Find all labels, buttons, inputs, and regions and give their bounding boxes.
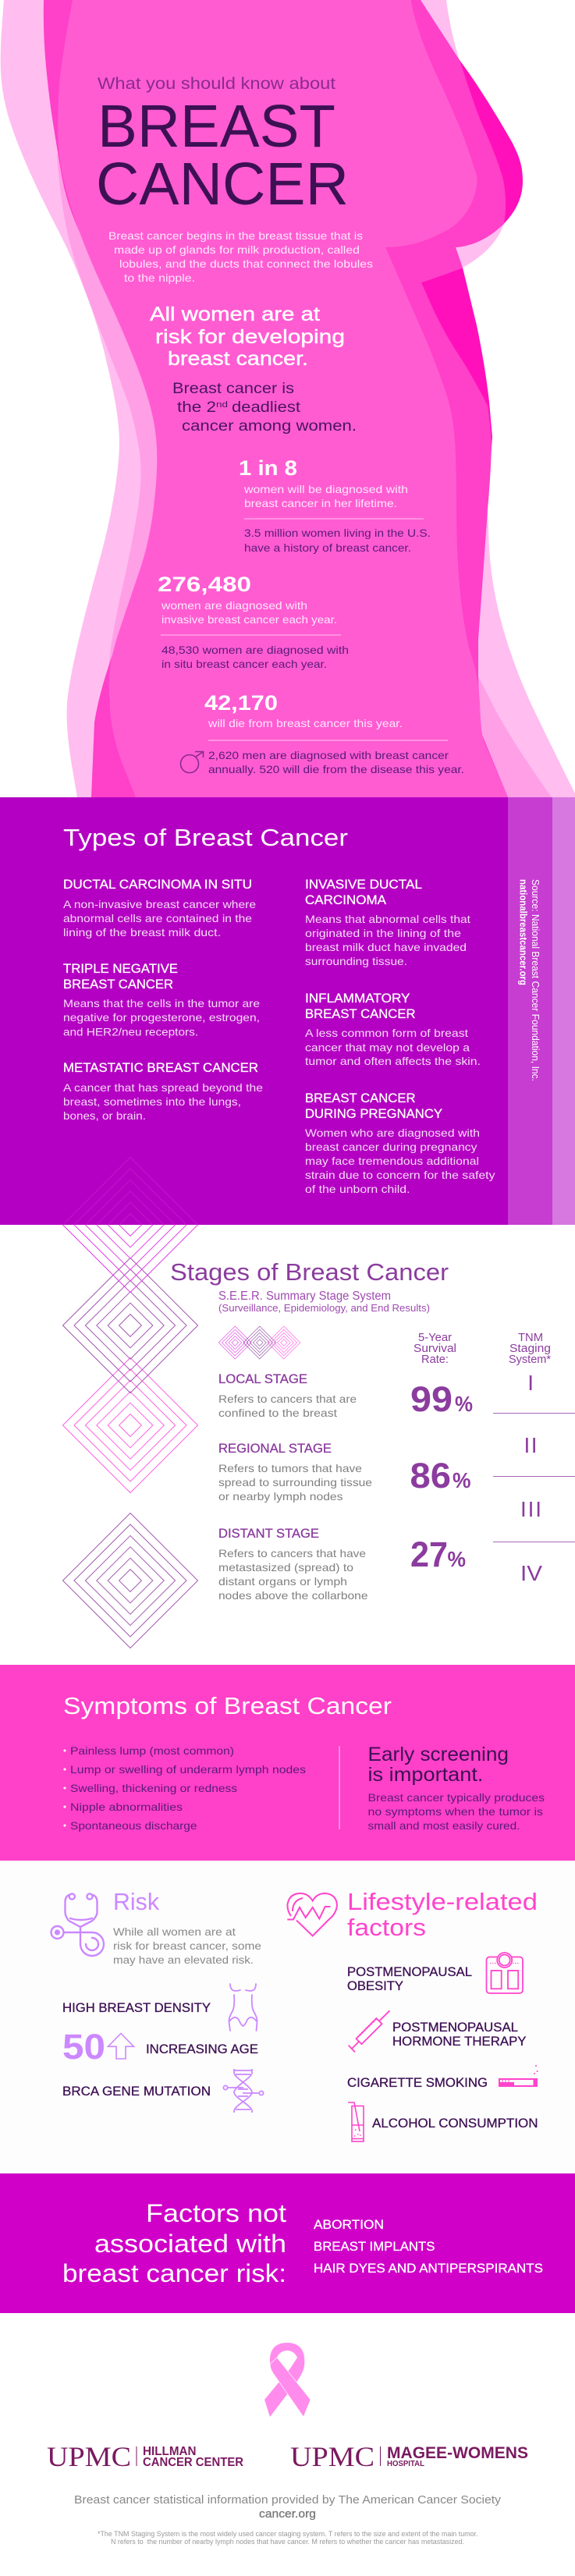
heading: risk: Risk xyxy=(113,1888,159,1915)
panel: symptoms of breast cancer xyxy=(0,1665,575,1861)
type: during pregnancy: strain due to concern for the safety xyxy=(305,1169,495,1181)
footnote: *The TNM Staging System is the most widely used cancer staging system. T refers to the size and extent of the main tumor. xyxy=(98,2530,477,2538)
type: inflammatory: tumor and often affects the skin. xyxy=(305,1055,481,1067)
logo: UPMC Magee-Womens Hospital: UPMC xyxy=(290,2441,374,2472)
lifestyle factor: obesity xyxy=(347,1965,472,1993)
callout: all women at risk: breast cancer. xyxy=(168,348,308,370)
type: invasive ductal carcinoma: INVASIVE DUCTAL xyxy=(305,878,422,892)
text block: introduction: made up of glands for milk production, called xyxy=(114,243,360,256)
footnote: N refers to the number of nearby lymph nodes that have cancer. M refers to whether the cancer has metastasized. xyxy=(111,2538,464,2546)
text block: risk: While all women are at xyxy=(113,1925,236,1938)
callout: all women at risk: All women are at xyxy=(150,303,320,325)
survival rates: % xyxy=(448,1547,466,1571)
type: triple negative: TRIPLE NEGATIVE xyxy=(63,962,178,976)
type: during pregnancy: breast cancer during pregnancy xyxy=(305,1141,477,1153)
icon: syringe xyxy=(349,2010,390,2052)
risk factor: increasing age: 50 xyxy=(62,2027,105,2067)
type: ductal carcinoma in situ xyxy=(63,878,256,939)
statistic: 1 in 8 xyxy=(239,456,431,554)
statistic: 1 in 8: breast cancer in her lifetime. xyxy=(244,497,397,509)
type: metastatic: breast, sometimes into the lungs, xyxy=(63,1095,241,1108)
type: during pregnancy: DURING PREGNANCY xyxy=(305,1107,442,1121)
type: ductal carcinoma in situ: abnormal cells are contained in the xyxy=(63,912,252,924)
TNM numerals: II xyxy=(524,1433,537,1457)
statistic: 42,170: will die from breast cancer this year. xyxy=(208,717,403,729)
text block: risk: may have an elevated risk. xyxy=(113,1953,254,1966)
subtitle: SEER xyxy=(218,1290,430,1314)
type: during pregnancy: Women who are diagnosed with xyxy=(305,1127,480,1139)
footnote xyxy=(98,2530,477,2546)
survival rates: % xyxy=(453,1468,471,1492)
text block: introduction xyxy=(108,229,373,284)
heading: types: Types of Breast Cancer xyxy=(63,824,348,851)
type: during pregnancy xyxy=(305,1091,495,1195)
risk factor: increasing age xyxy=(62,2027,258,2067)
callout: early screening: small and most easily cured. xyxy=(368,1819,520,1832)
list: non-risk factors: ABORTION xyxy=(314,2218,384,2232)
heading: lifestyle-related factors xyxy=(347,1888,538,1941)
symptom list: Swelling, thickening or redness xyxy=(70,1782,237,1794)
credit line xyxy=(74,2493,502,2521)
heading: stages: Stages of Breast Cancer xyxy=(170,1258,449,1286)
title xyxy=(96,75,349,218)
stage: local xyxy=(218,1372,357,1419)
panel: stages of breast cancer xyxy=(170,1258,575,1602)
type: ductal carcinoma in situ: lining of the breast milk duct. xyxy=(63,926,221,939)
statistic: 1 in 8: 1 in 8 xyxy=(239,456,297,480)
callout: all women at risk xyxy=(150,303,345,370)
symptom list xyxy=(63,1744,306,1832)
statistic: 42,170 xyxy=(204,691,464,775)
callout: early screening: no symptoms when the tumor is xyxy=(368,1805,543,1818)
source note xyxy=(518,879,541,1081)
type: inflammatory: A less common form of breast xyxy=(305,1027,468,1039)
source note: nationalbreastcancer.org xyxy=(518,879,529,985)
lifestyle factor: hormone therapy xyxy=(392,2021,526,2049)
TNM numerals: III xyxy=(520,1497,541,1521)
icon: stethoscope xyxy=(51,1893,104,1956)
type: inflammatory: BREAST CANCER xyxy=(305,1007,416,1021)
symptom list: Lump or swelling of underarm lymph nodes xyxy=(70,1763,306,1776)
type: invasive ductal carcinoma: breast milk duct have invaded xyxy=(305,941,467,953)
callout: second deadliest: deadliest xyxy=(232,399,301,416)
subtitle: SEER: S.E.E.R. Summary Stage System xyxy=(218,1290,391,1303)
stage: distant: Refers to cancers that have xyxy=(218,1547,366,1559)
stage: distant xyxy=(218,1527,368,1602)
lifestyle factor: cigarette smoking: CIGARETTE SMOKING xyxy=(347,2076,488,2090)
type: inflammatory: cancer that may not develop a xyxy=(305,1041,470,1053)
risk factor: increasing age: INCREASING AGE xyxy=(146,2042,258,2056)
callout: early screening: Breast cancer typically produces xyxy=(368,1791,545,1804)
logo: UPMC Hillman Cancer Center: UPMC xyxy=(47,2441,131,2472)
lifestyle factor: obesity: OBESITY xyxy=(347,1979,403,1993)
stage: distant: distant organs or lymph xyxy=(218,1575,347,1588)
stage: regional: REGIONAL STAGE xyxy=(218,1442,332,1456)
survival rates: 86 xyxy=(410,1456,451,1496)
heading: factors not associated: associated with xyxy=(94,2230,286,2258)
risk factor: high breast density: HIGH BREAST DENSITY xyxy=(62,2001,211,2015)
survival rates xyxy=(410,1379,473,1574)
callout: second deadliest xyxy=(172,381,357,435)
column heading: survival rate: Rate: xyxy=(421,1353,449,1366)
type: ductal carcinoma in situ: A non-invasive breast cancer where xyxy=(63,898,256,910)
panel: risk and lifestyle background xyxy=(0,1861,575,2173)
icon: male symbol xyxy=(181,752,203,772)
icon: DNA xyxy=(223,2069,264,2113)
logo: UPMC Hillman Cancer Center xyxy=(47,2441,243,2472)
logo: UPMC Magee-Womens Hospital: HOSPITAL xyxy=(387,2459,425,2468)
stage: regional: or nearby lymph nodes xyxy=(218,1490,343,1503)
text block: introduction: to the nipple. xyxy=(124,271,195,284)
list: non-risk factors xyxy=(314,2218,543,2276)
column heading: survival rate: Survival xyxy=(414,1342,456,1355)
callout: early screening: is important. xyxy=(368,1764,484,1786)
type: triple negative: Means that the cells in the tumor are xyxy=(63,997,260,1009)
survival rates: 99 xyxy=(410,1379,453,1419)
logo: UPMC Hillman Cancer Center: CANCER CENTER xyxy=(143,2456,243,2469)
logo: UPMC Magee-Womens Hospital xyxy=(290,2441,528,2472)
text block: risk xyxy=(113,1925,261,1966)
statistic: 42,170: annually. 520 will die from the disease this year. xyxy=(208,763,464,775)
column heading: survival rate xyxy=(414,1331,456,1366)
type: invasive ductal carcinoma: Means that abnormal cells that xyxy=(305,913,470,925)
callout: second deadliest: the 2 xyxy=(177,399,216,416)
statistic: 276,480 xyxy=(158,573,349,670)
icon: up arrow xyxy=(108,2033,134,2059)
statistic: 42,170: 2,620 men are diagnosed with breast cancer xyxy=(208,749,449,761)
column heading: TNM: TNM xyxy=(518,1331,543,1344)
survival rates: 27 xyxy=(410,1535,448,1574)
type: triple negative: negative for progesterone, estrogen, xyxy=(63,1011,260,1024)
icon: heart with pulse xyxy=(287,1893,337,1936)
icon: scale xyxy=(487,1953,523,1993)
title: BREAST xyxy=(98,93,335,160)
symptom list: Spontaneous discharge xyxy=(70,1819,197,1832)
type: triple negative: and HER2/neu receptors. xyxy=(63,1025,198,1038)
icon: torso xyxy=(229,1984,257,2031)
survival rates: % xyxy=(455,1392,473,1416)
statistic: 276,480: invasive breast cancer each year. xyxy=(161,613,337,626)
type: metastatic: A cancer that has spread beyond the xyxy=(63,1081,263,1094)
stage: distant: nodes above the collarbone xyxy=(218,1589,368,1602)
stage: local: Refers to cancers that are xyxy=(218,1393,357,1405)
lifestyle factor: alcohol consumption: ALCOHOL CONSUMPTION xyxy=(372,2117,538,2131)
statistic: 1 in 8: have a history of breast cancer. xyxy=(244,541,411,554)
type: during pregnancy: of the unborn child. xyxy=(305,1183,410,1195)
heading: factors not associated xyxy=(62,2199,286,2287)
heading: symptoms: Symptoms of Breast Cancer xyxy=(63,1692,392,1719)
statistic: 276,480: 48,530 women are diagnosed with xyxy=(161,644,349,656)
list: non-risk factors: HAIR DYES AND ANTIPERSPIRANTS xyxy=(314,2262,543,2276)
heading: factors not associated: breast cancer risk: xyxy=(62,2259,286,2287)
list: non-risk factors: BREAST IMPLANTS xyxy=(314,2240,435,2254)
TNM numerals: IV xyxy=(520,1561,542,1585)
stage: local: LOCAL STAGE xyxy=(218,1372,307,1386)
statistic: 1 in 8: women will be diagnosed with xyxy=(243,483,408,495)
source note: Source: National Breast Cancer Foundation, Inc. xyxy=(530,879,541,1081)
type: metastatic: bones, or brain. xyxy=(63,1109,146,1122)
title: CANCER xyxy=(96,151,349,218)
type: during pregnancy: may face tremendous additional xyxy=(305,1155,479,1167)
type: during pregnancy: BREAST CANCER xyxy=(305,1091,416,1105)
icon: cigarette xyxy=(499,2065,538,2086)
symptom list: Nipple abnormalities xyxy=(70,1801,183,1813)
logo: UPMC Hillman Cancer Center: HILLMAN xyxy=(143,2445,197,2458)
type: invasive ductal carcinoma: originated in the lining of the xyxy=(305,927,461,939)
type: invasive ductal carcinoma: CARCINOMA xyxy=(305,893,386,907)
type: invasive ductal carcinoma xyxy=(305,878,470,967)
column heading: survival rate: 5-Year xyxy=(418,1331,452,1344)
stage: distant: DISTANT STAGE xyxy=(218,1527,319,1541)
callout: early screening xyxy=(368,1744,545,1832)
statistic: 276,480: in situ breast cancer each year. xyxy=(161,658,327,670)
type: ductal carcinoma in situ: DUCTAL CARCINOMA IN SITU xyxy=(63,878,252,892)
column heading: TNM: System* xyxy=(509,1353,551,1366)
stage: regional: spread to surrounding tissue xyxy=(218,1476,372,1488)
risk factor: BRCA gene mutation: BRCA GENE MUTATION xyxy=(62,2085,211,2099)
type: metastatic xyxy=(63,1061,263,1122)
lifestyle factor: hormone therapy: HORMONE THERAPY xyxy=(392,2035,526,2049)
stage: local: confined to the breast xyxy=(218,1407,337,1419)
heading: lifestyle-related factors: factors xyxy=(347,1914,426,1941)
logo: UPMC Magee-Womens Hospital: MAGEE-WOMENS xyxy=(387,2444,528,2462)
title: What you should know about xyxy=(98,75,335,93)
decorative diamonds column xyxy=(62,1158,198,1648)
lifestyle factor: obesity: POSTMENOPAUSAL xyxy=(347,1965,472,1979)
icon: drink xyxy=(348,2102,364,2141)
heading: factors not associated: Factors not xyxy=(146,2199,286,2227)
heading: lifestyle-related factors: Lifestyle-related xyxy=(347,1888,538,1915)
column heading: TNM xyxy=(509,1331,551,1366)
credit line: cancer.org xyxy=(259,2507,316,2521)
type: metastatic: METASTATIC BREAST CANCER xyxy=(63,1061,258,1075)
statistic: 42,170: 42,170 xyxy=(204,691,278,715)
type: invasive ductal carcinoma: surrounding tissue. xyxy=(305,955,407,967)
column heading: TNM: Staging xyxy=(509,1342,551,1355)
panel: factors not associated xyxy=(0,2173,575,2313)
stage: distant: metastasized (spread) to xyxy=(218,1561,353,1574)
panel: types of breast cancer xyxy=(0,797,575,1225)
TNM numerals: I xyxy=(527,1371,534,1395)
callout: second deadliest: nd xyxy=(216,400,228,410)
text block: risk: risk for breast cancer, some xyxy=(113,1939,261,1952)
icon: pink ribbon xyxy=(264,2343,311,2417)
text block: introduction: Breast cancer begins in the breast tissue that is xyxy=(108,229,363,242)
statistic: 276,480: women are diagnosed with xyxy=(161,599,307,612)
callout: all women at risk: risk for developing xyxy=(155,326,345,348)
statistic: 1 in 8: 3.5 million women living in the U.S. xyxy=(244,527,431,539)
callout: second deadliest: Breast cancer is xyxy=(172,381,294,397)
lifestyle factor: hormone therapy: POSTMENOPAUSAL xyxy=(392,2021,518,2035)
callout: second deadliest: cancer among women. xyxy=(182,418,357,435)
type: triple negative: BREAST CANCER xyxy=(63,978,173,992)
symptom list: Painless lump (most common) xyxy=(70,1744,234,1757)
subtitle: SEER: (Surveillance, Epidemiology, and End Results) xyxy=(218,1302,430,1314)
icon: three small diamonds xyxy=(218,1326,300,1359)
credit line: Breast cancer statistical information provided by The American Cancer Society xyxy=(74,2493,502,2507)
stage: regional xyxy=(218,1442,372,1503)
callout: early screening: Early screening xyxy=(368,1744,509,1765)
type: triple negative xyxy=(63,962,260,1038)
panel: hero body silhouette xyxy=(1,0,575,797)
type: inflammatory: INFLAMMATORY xyxy=(305,992,410,1006)
type: inflammatory xyxy=(305,992,481,1067)
TNM numerals xyxy=(520,1371,542,1585)
stage: regional: Refers to tumors that have xyxy=(218,1462,362,1474)
statistic: 276,480: 276,480 xyxy=(158,573,251,596)
text block: introduction: lobules, and the ducts that connect the lobules xyxy=(119,257,373,270)
